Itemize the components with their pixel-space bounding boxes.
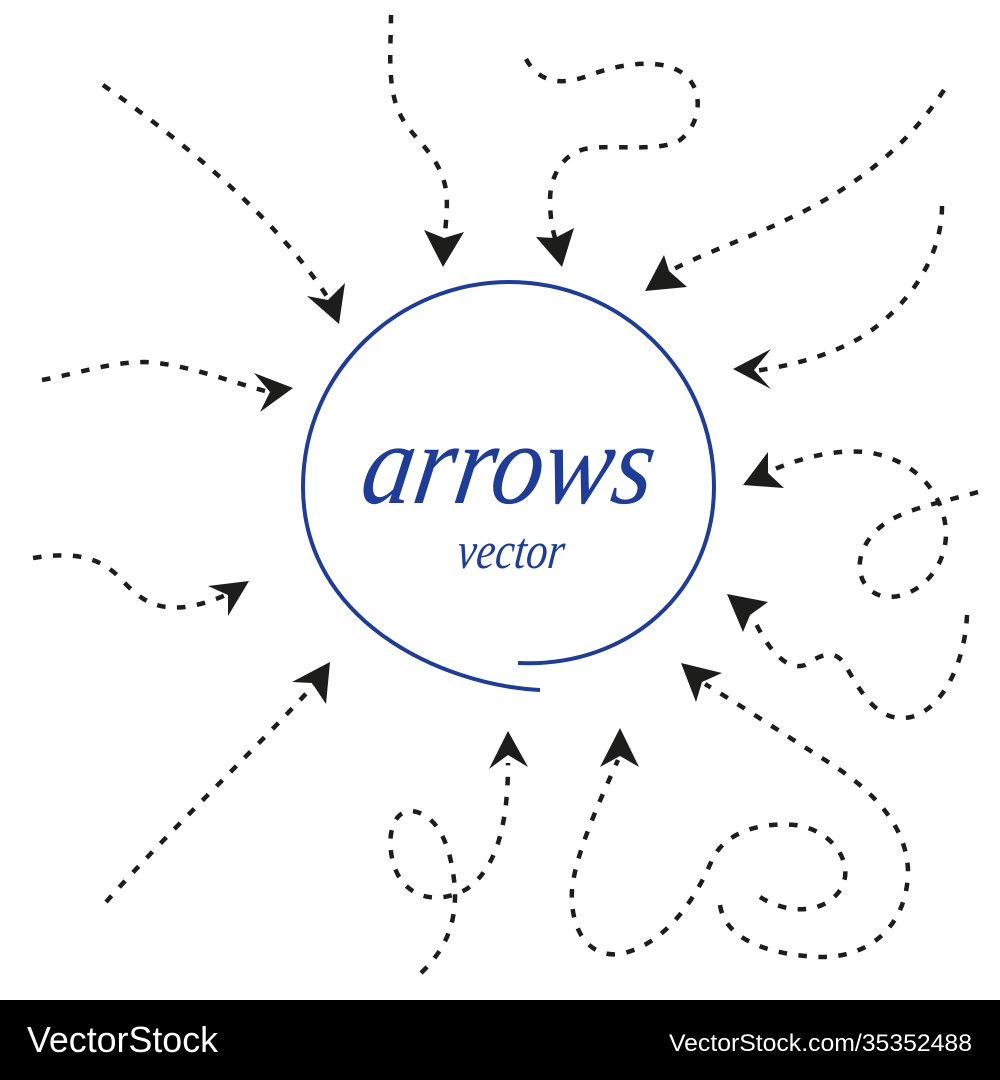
footer image id: VectorStock.com/35352488 xyxy=(669,1030,972,1057)
footer bar xyxy=(0,1000,1000,1080)
arrow: bottom spiral inner xyxy=(572,728,845,954)
spiral circle outline xyxy=(303,282,714,690)
arrow: right curved xyxy=(733,206,942,389)
arrow: top wavy xyxy=(390,15,464,267)
arrow: left wavy upper xyxy=(42,362,293,412)
arrow: lower left diagonal xyxy=(106,662,330,902)
arrow: left wavy lower xyxy=(33,555,249,616)
arrow: bottom spiral outer xyxy=(681,663,908,957)
footer brand: VectorStock xyxy=(27,1019,219,1060)
title: arrows: arrows xyxy=(354,401,665,529)
arrow: right loop xyxy=(743,452,978,597)
arrow: top curl xyxy=(526,59,698,267)
arrow: upper right diagonal xyxy=(645,90,944,291)
arrow: bottom loop xyxy=(390,731,528,973)
arrow: upper left diagonal xyxy=(103,85,345,324)
subtitle: vector: vector xyxy=(455,523,568,580)
arrow: lower right wavy xyxy=(727,594,967,718)
